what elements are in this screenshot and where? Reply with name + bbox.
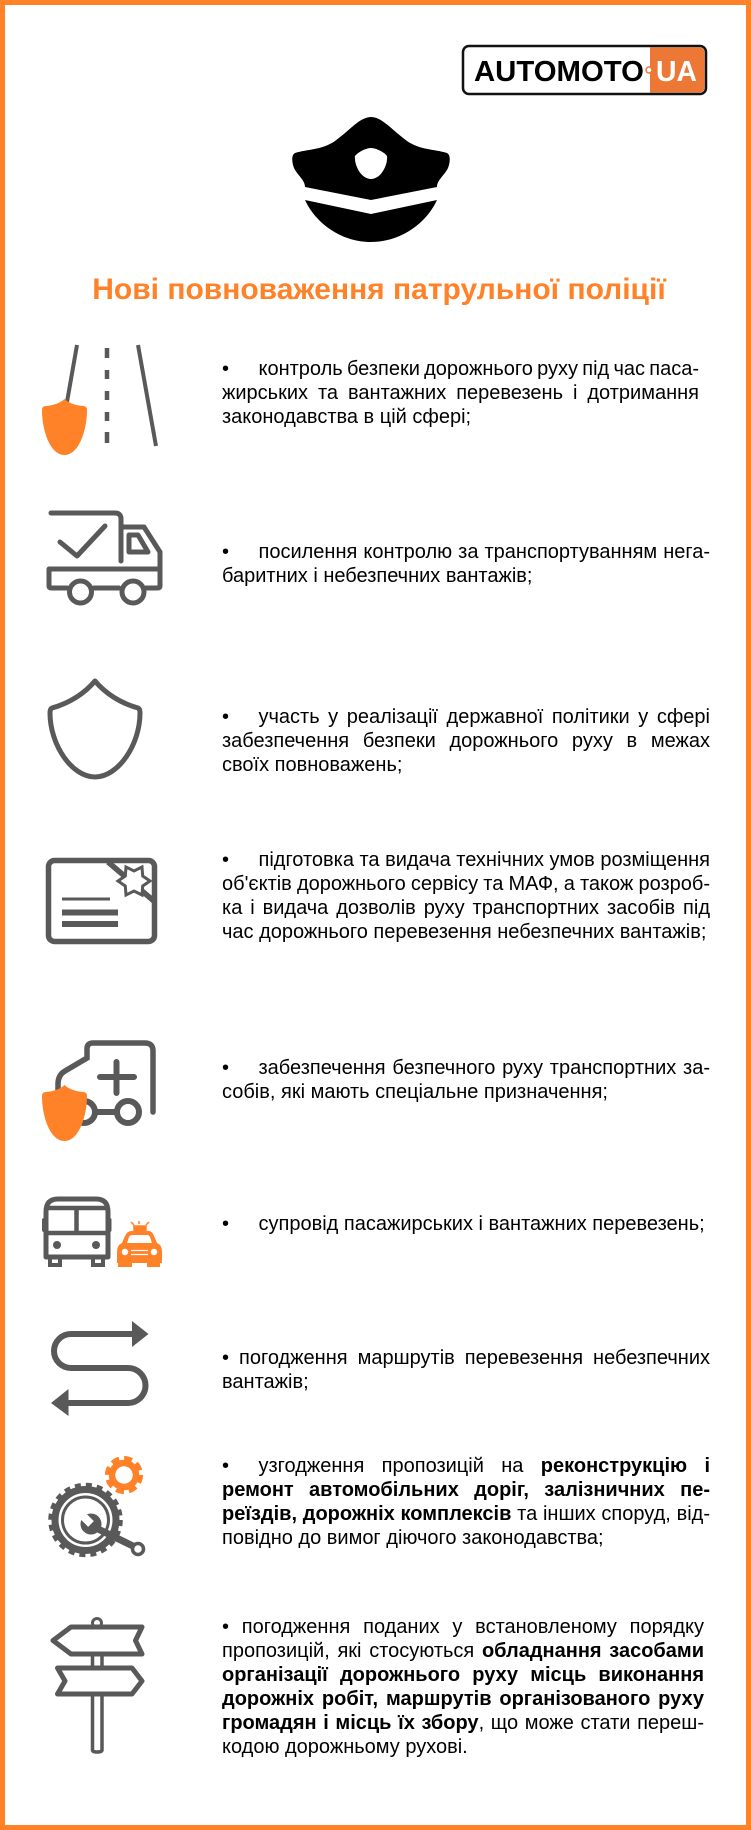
text: route approval: [222, 1347, 710, 1393]
text: route approval: • погодження маршрутів перевезення небезпечних: [222, 1347, 710, 1369]
text: traffic organisation proposals: громадян і місць їх збору, що може стати переш-: [222, 1712, 704, 1734]
icon: truck with check mark: [49, 513, 160, 603]
text: traffic organisation proposals: дорожніх робіт, маршрутів організованого руху: [222, 1688, 704, 1710]
text: passenger and freight safety control: контроль безпеки дорожнього руху під час паса-: [258, 358, 699, 380]
text: road reconstruction proposals: узгодження пропозицій на реконструкцію і: [258, 1455, 710, 1477]
text: passenger and freight safety control: [222, 358, 699, 428]
text: route approval: вантажів;: [222, 1371, 309, 1393]
icon: gear with wrench and orange cog: [50, 1458, 144, 1555]
text: escort of transport: супровід пасажирських і вантажних перевезень;: [258, 1213, 705, 1235]
text: traffic organisation proposals: кодою дорожньому рухові.: [222, 1736, 468, 1758]
icon: bus and police car: [42, 1199, 162, 1267]
text: technical conditions and permits: [222, 849, 710, 943]
text: traffic organisation proposals: організації дорожнього руху місць виконання: [222, 1664, 704, 1686]
text: technical conditions and permits: підготовка та видача технічних умов розміщення: [258, 849, 710, 871]
text: special purpose vehicles: забезпечення безпечного руху транспортних за-: [258, 1057, 710, 1079]
text: passenger and freight safety control: •: [222, 358, 229, 380]
text: escort of transport: •: [222, 1213, 229, 1235]
text: technical conditions and permits: час дорожнього перевезення небезпечних вантажів;: [222, 921, 706, 943]
icon: winding route arrows: [51, 1321, 148, 1416]
icon: signpost: [53, 1618, 142, 1752]
text: state road safety policy: забезпечення безпеки дорожнього руху в межах: [222, 730, 710, 752]
text: traffic organisation proposals: [222, 1616, 704, 1758]
icon: police cap: [292, 117, 450, 242]
text: road reconstruction proposals: повідно до вимог діючого законодавства;: [222, 1527, 604, 1549]
icon: ambulance with shield: [42, 1043, 153, 1141]
title: Нові повноваження патрульної поліції: [92, 273, 666, 306]
text: state road safety policy: участь у реалізації державної політики у сфері: [258, 706, 710, 728]
text: road reconstruction proposals: ремонт автомобільних доріг, залізничних пе-: [222, 1479, 710, 1501]
logo: AUTOMOTO UA: [463, 46, 706, 94]
text: special purpose vehicles: собів, які мають спеціальне призначення;: [222, 1081, 608, 1103]
text: technical conditions and permits: об'єктів дорожнього сервісу та МАФ, а також розроб-: [222, 873, 710, 895]
text: passenger and freight safety control: жирських та вантажних перевезень і дотримання: [222, 382, 699, 404]
text: state road safety policy: своїх повноважень;: [222, 754, 402, 776]
text: special purpose vehicles: •: [222, 1057, 229, 1079]
text: technical conditions and permits: •: [222, 849, 229, 871]
text: oversized and dangerous cargo: [222, 541, 710, 587]
text: road reconstruction proposals: реїздів, дорожніх комплексів та інших споруд, від-: [222, 1503, 710, 1525]
text: oversized and dangerous cargo: посилення контролю за транспортуванням нега-: [258, 541, 710, 563]
icon: road with shield: [42, 345, 156, 455]
text: oversized and dangerous cargo: •: [222, 541, 229, 563]
text: special purpose vehicles: [222, 1057, 710, 1103]
logo: AUTOMOTO UA: UA: [656, 56, 697, 88]
text: traffic organisation proposals: • погодження поданих у встановленому порядку: [222, 1616, 704, 1638]
text: traffic organisation proposals: пропозицій, які стосуються обладнання засобами: [222, 1640, 704, 1662]
text: passenger and freight safety control: законодавства в цій сфері;: [222, 406, 471, 428]
text: road reconstruction proposals: [222, 1455, 710, 1549]
icon: shield outline: [50, 681, 140, 777]
text: technical conditions and permits: ка і видача дозволів руху транспортних засобів під: [222, 897, 710, 919]
text: state road safety policy: •: [222, 706, 229, 728]
logo: AUTOMOTO UA: AUTOMOTO: [474, 56, 644, 88]
text: state road safety policy: [222, 706, 710, 776]
icon: permit document with star: [48, 860, 155, 942]
text: oversized and dangerous cargo: баритних і небезпечних вантажів;: [222, 565, 532, 587]
text: road reconstruction proposals: •: [222, 1455, 229, 1477]
